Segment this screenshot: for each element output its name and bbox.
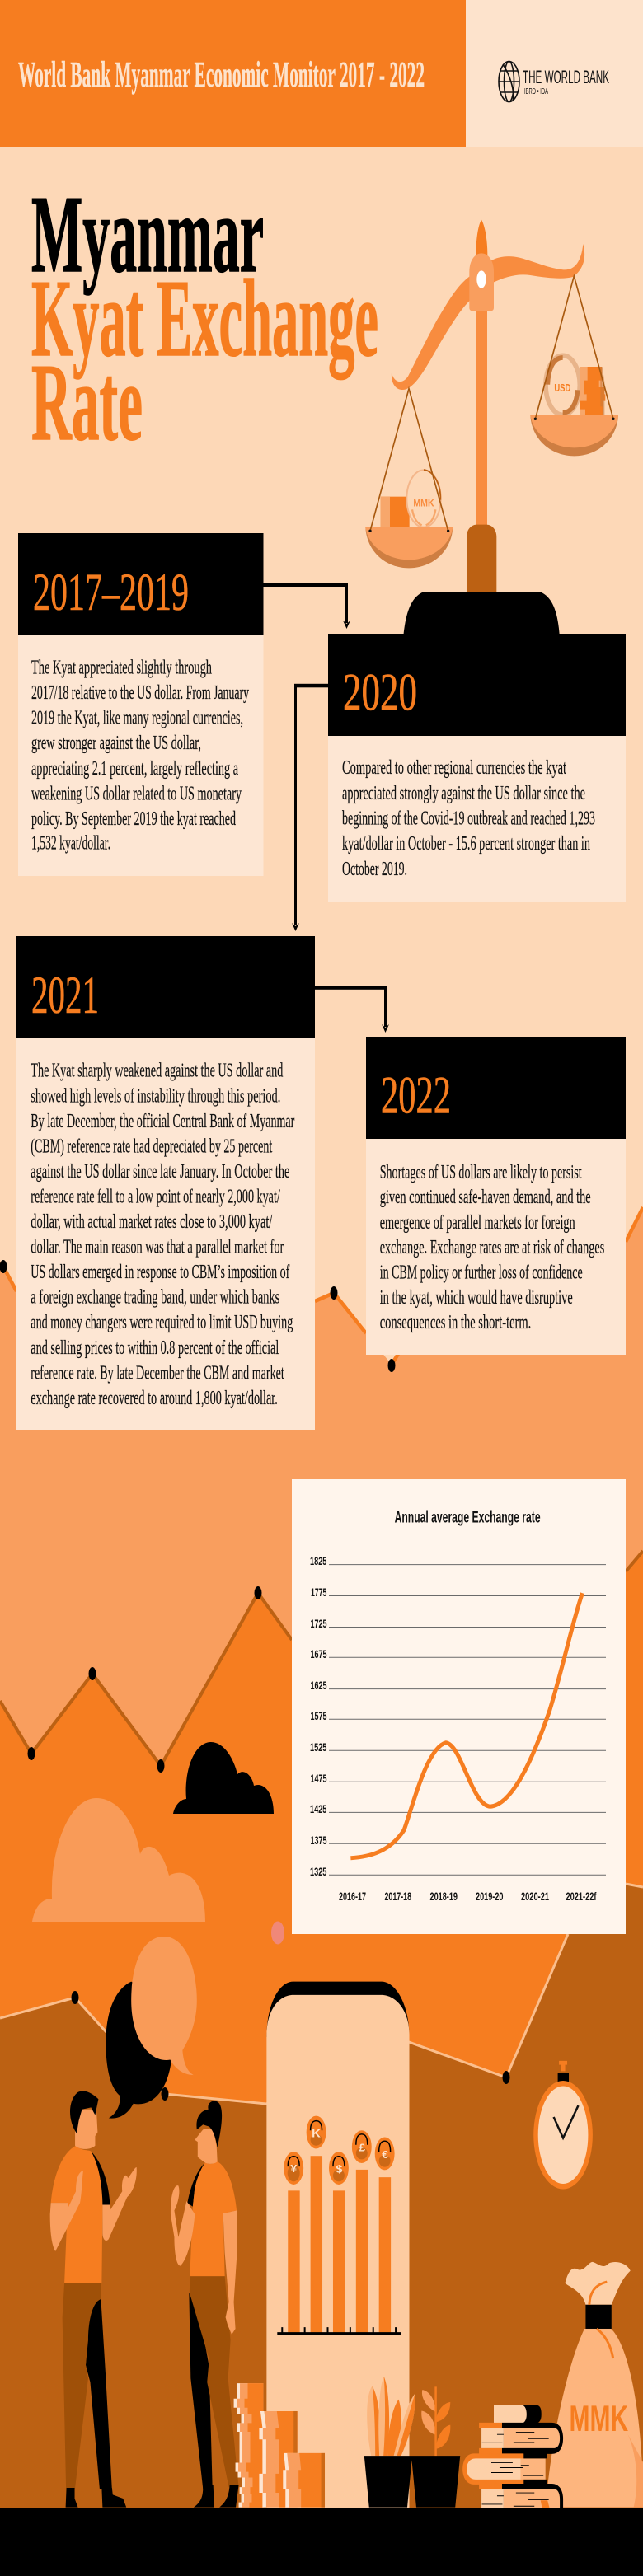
right pan [530, 276, 618, 456]
body text: exchange rate recovered to around 1,800 kyat/dollar. [31, 1387, 278, 1409]
bag frill [566, 2262, 631, 2305]
man left arm [50, 2171, 83, 2251]
World Bank logo [499, 61, 609, 102]
landscape: dark hill [0, 1884, 643, 2513]
coin: pound: £ [359, 2142, 366, 2154]
icon: pink ellipse [271, 1922, 284, 1945]
heading: 2020: 2020 [343, 663, 417, 723]
person: woman [171, 2101, 239, 2508]
floor [0, 2508, 643, 2576]
plant left [367, 2377, 415, 2456]
MMK coin stack [381, 497, 410, 527]
body text [31, 656, 249, 855]
woman hair [196, 2101, 222, 2147]
body text: dollar, with actual market rates close to 3,000 kyat/ [31, 1211, 272, 1233]
body text: October 2019. [342, 858, 407, 880]
chart y axis labels: 1525 [310, 1740, 327, 1754]
heading: 2022: 2022 [381, 1066, 451, 1125]
chart x axis labels: 2017-18 [384, 1890, 411, 1903]
icon: black cloud [173, 1742, 274, 1814]
panel body [16, 1037, 315, 1430]
logo globe [499, 61, 519, 102]
book 1 [494, 2405, 542, 2424]
woman left arm [171, 2185, 195, 2266]
MMK coin [406, 470, 441, 527]
heading: 2017-2019: 2017–2019 [33, 563, 189, 622]
landscape: light orange hill [0, 1207, 643, 2060]
body text [342, 756, 595, 880]
stopwatch hands [554, 2105, 578, 2138]
body text: appreciating 2.1 percent, largely reflecting a [31, 757, 238, 780]
chart y axis labels [310, 1554, 327, 1878]
chart title: Annual average Exchange rate [395, 1510, 541, 1526]
body text: 1,532 kyat/dollar. [31, 832, 110, 855]
panel: 2022 [366, 1037, 626, 1355]
arrow: 2017-2019 to 2020 [263, 583, 350, 629]
book 4 [479, 2484, 563, 2508]
panel heading bar [16, 936, 315, 1038]
stack of books [462, 2405, 563, 2508]
trend line: lower right [626, 1884, 643, 1887]
speech bubble: black [106, 1982, 171, 2119]
panel: 2021 [16, 936, 315, 1430]
speech bubble: light [131, 1937, 197, 2075]
chart y axis labels: 1325 [310, 1865, 327, 1878]
chart x axis labels [339, 1890, 597, 1903]
panel body [328, 735, 626, 902]
coin: euro: € [382, 2148, 389, 2161]
balance scale illustration [365, 220, 618, 593]
trend line: lower [0, 1934, 568, 2104]
body text: grew stronger against the US dollar, [31, 732, 201, 754]
chart y axis labels: 1775 [311, 1585, 327, 1599]
man right arm [102, 2167, 137, 2241]
panel heading bar [366, 1037, 626, 1139]
panel body [18, 635, 264, 876]
arrow: 2021 to 2022 [315, 986, 389, 1033]
bag body [546, 2329, 643, 2508]
icon: light cloud [32, 1798, 205, 1922]
chart y axis labels: 1375 [310, 1834, 327, 1847]
scale beam left [392, 275, 472, 390]
stopwatch stem [559, 2061, 567, 2071]
chart y axis labels: 1425 [310, 1802, 327, 1815]
scale base dome [403, 592, 560, 639]
panel body [366, 1138, 626, 1355]
woman black leg [189, 2293, 213, 2489]
money bag MMK [546, 2262, 643, 2508]
woman pants [190, 2276, 239, 2487]
body text: US dollars emerged in response to CBM’s imposition of [31, 1261, 290, 1283]
bars [288, 2156, 391, 2333]
chart line [350, 1593, 582, 1858]
coin: kyat [307, 2116, 326, 2148]
pillar: back arch [266, 1982, 410, 2037]
chart y axis labels: 1825 [310, 1554, 327, 1567]
body text [380, 1161, 604, 1333]
stopwatch face [538, 2086, 588, 2184]
body text [31, 1060, 294, 1409]
man hair [70, 2091, 98, 2133]
scale pole [476, 307, 487, 527]
woman shoes [194, 2485, 239, 2508]
coin: yen: ¥ [290, 2163, 298, 2175]
header bar [0, 0, 466, 147]
chart x axis labels: 2019-20 [476, 1890, 504, 1903]
panel: 2020 [328, 634, 626, 902]
chart background [292, 1479, 626, 1934]
woman back sleeve [187, 2163, 205, 2207]
chart x axis labels: 2020-21 [521, 1890, 549, 1903]
body text: The Kyat sharply weakened against the US dollar and [31, 1060, 283, 1082]
axis [277, 2327, 401, 2335]
USD coin stack [580, 367, 605, 415]
scale pivot [469, 253, 494, 311]
body text: reference rate fell to a low point of nearly 2,000 kyat/ [31, 1185, 280, 1208]
arrow: 2020 to 2021 [292, 684, 328, 931]
chart y axis labels: 1625 [310, 1679, 327, 1692]
body text: policy. By September 2019 the kyat reached [31, 808, 236, 830]
man pants [63, 2283, 101, 2488]
man neck and face [75, 2110, 97, 2149]
body text: 2017/18 relative to the US dollar. From January [31, 681, 249, 704]
chart y axis labels: 1725 [310, 1617, 327, 1630]
USD coin: USD [554, 382, 570, 394]
flower pots [364, 2456, 460, 2508]
woman neck and face [195, 2129, 218, 2164]
main title [31, 173, 378, 463]
landscape: orange hill [0, 1551, 643, 2225]
left pan [365, 389, 453, 568]
man shirt [51, 2146, 102, 2283]
body text: a foreign exchange trading band, under which banks [31, 1286, 279, 1309]
body text: (CBM) reference rate had depreciated by 25 percent [31, 1135, 272, 1157]
chart gridlines [329, 1565, 606, 1875]
stopwatch crown [558, 2073, 569, 2082]
coin stack 3 [283, 2452, 325, 2508]
plant right [421, 2386, 450, 2457]
pillar [266, 1995, 410, 2512]
man back sleeve [91, 2152, 110, 2204]
book 2 [479, 2423, 563, 2454]
lower illustration [50, 1937, 643, 2512]
woman shirt [190, 2161, 237, 2276]
chart x axis labels: 2021-22f [566, 1890, 597, 1903]
MMK coin: MMK [413, 497, 434, 508]
coin: dollar [329, 2152, 349, 2185]
body text: and money changers were required to limit USD buying [31, 1311, 293, 1333]
body text: 2019 the Kyat, like many regional currencies, [31, 707, 243, 729]
panel: 2017-2019 [18, 533, 264, 876]
main title: Myanmar [31, 173, 264, 295]
body text: and selling prices to within 0.8 percent of the official [31, 1337, 279, 1359]
bar chart on pillar [277, 2116, 401, 2335]
chart y axis labels: 1575 [310, 1709, 327, 1722]
body text: dollar. The main reason was that a parallel market for [31, 1236, 284, 1258]
chart y axis labels: 1475 [310, 1772, 327, 1785]
body text: The Kyat appreciated slightly through [31, 656, 212, 678]
stopwatch case [533, 2081, 593, 2190]
chart x axis labels: 2016-17 [339, 1890, 366, 1903]
body text: consequences in the short-term. [380, 1311, 531, 1333]
scale pivot hole [476, 270, 486, 288]
bag band [585, 2305, 612, 2329]
coin: pound [352, 2130, 372, 2163]
bag accents [589, 2282, 613, 2358]
man shoes [66, 2488, 126, 2508]
panel heading bar [328, 634, 626, 736]
person: man [50, 2091, 137, 2508]
book 3 [462, 2453, 547, 2485]
coin: kyat: K [312, 2128, 322, 2140]
coin: euro [375, 2138, 395, 2170]
trend line: middle right [626, 1551, 643, 1571]
body text: against the US dollar since late January. In October the [31, 1160, 289, 1183]
heading: 2021: 2021 [31, 966, 99, 1025]
chart panel: annual average exchange rate [292, 1479, 626, 1934]
logo subtitle: IBRD • IDA [524, 87, 548, 96]
stopwatch [533, 2061, 593, 2190]
chart y axis labels: 1675 [310, 1647, 327, 1660]
trend line: upper [3, 1207, 643, 1365]
scale beam right [490, 244, 584, 283]
body text: By late December, the official Central Bank of Myanmar [31, 1110, 294, 1132]
man black leg [86, 2299, 112, 2489]
title line: Rate: Rate [31, 341, 143, 463]
bag fold [627, 2433, 643, 2508]
panel heading bar [18, 533, 264, 635]
trend line: middle [0, 1593, 292, 1766]
USD coin [546, 355, 580, 415]
coin stack 1 [234, 2383, 264, 2508]
coin: dollar: $ [336, 2163, 343, 2175]
chart x axis labels: 2018-19 [430, 1890, 458, 1903]
body text: weakening US dollar related to US monetary [31, 783, 242, 805]
scale base post [467, 525, 496, 593]
coin stack 2 [259, 2411, 298, 2508]
body text: reference rate. By late December the CBM and market [31, 1361, 284, 1384]
scale finial [476, 220, 487, 255]
coin: yen [284, 2152, 303, 2185]
woman right arm [223, 2210, 237, 2335]
body text: showed high levels of instability through this period. [31, 1084, 280, 1107]
header logo panel [466, 0, 643, 147]
trend dots [0, 1260, 509, 2101]
